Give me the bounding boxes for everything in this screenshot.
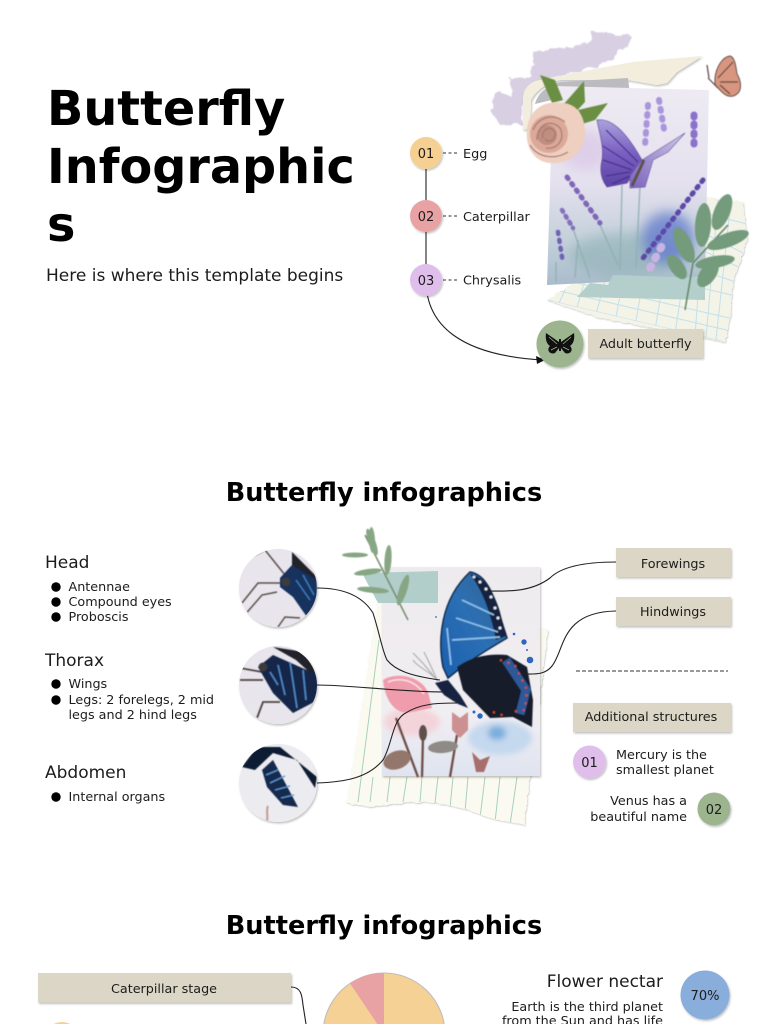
hindwings label: [616, 597, 731, 626]
thorax detail circle: [239, 646, 318, 724]
thorax text block: Legs: 2 forelegs, 2 mid: [68, 693, 214, 708]
main title: Infographic: [47, 140, 355, 195]
teal tape: [362, 571, 438, 603]
grid paper: [547, 197, 747, 342]
leaves above rose: [540, 75, 608, 124]
step 02: Caterpillar: [463, 210, 531, 225]
item 02: Venus has a: [610, 794, 687, 809]
dashes: [443, 153, 457, 280]
step 03: Chrysalis: [463, 274, 521, 288]
adult butterfly label: [588, 329, 703, 358]
adult butterfly icon: [536, 320, 584, 368]
flower nectar text: Earth is the third planet: [511, 1000, 663, 1015]
section heading: diet: Butterfly infographics: [226, 911, 542, 941]
leader lines: [317, 562, 616, 783]
70% badge: 70%: [691, 989, 719, 1004]
thorax text block: Thorax: [44, 651, 104, 671]
lifecycle timeline: [410, 137, 703, 368]
blue butterfly: [413, 572, 533, 727]
head text block: Compound eyes: [68, 595, 172, 610]
additional structures label: Additional structures: [585, 710, 718, 725]
thorax text block: Wings: [68, 677, 108, 692]
70% badge: [680, 970, 730, 1020]
step 01: Egg: [463, 147, 487, 162]
section heading: anatomy: Butterfly infographics: [226, 478, 542, 508]
photo card: [382, 567, 540, 776]
step 01: [410, 137, 487, 169]
blue splashes and washes: [384, 708, 532, 755]
lined paper: [347, 603, 548, 825]
illustration: lavender collage: [490, 32, 751, 342]
item 01: 01: [581, 756, 598, 771]
orange marker: [44, 1022, 80, 1024]
main title: Butterfly: [47, 82, 285, 137]
flower nectar text: [502, 972, 663, 1024]
item 02: 02: [706, 803, 722, 818]
connector line: [426, 153, 542, 360]
abdomen text block: [45, 763, 165, 805]
rose and buds: [381, 676, 490, 777]
grass stems: [556, 185, 640, 282]
forewings label: [616, 548, 731, 577]
cream folded paper: [523, 56, 702, 130]
caterpillar stage label: [38, 973, 291, 1002]
main title: s: [47, 198, 75, 253]
head text block: Head: [45, 553, 89, 573]
rose: [527, 102, 585, 163]
item 01: Mercury is the: [616, 748, 707, 763]
lavender sprigs: [558, 100, 703, 268]
abdomen text block: Internal organs: [68, 790, 165, 805]
head text block: Antennae: [68, 580, 130, 595]
leaf sprig: [342, 527, 412, 620]
item 02: beautiful name: [590, 810, 687, 825]
forewings label: Forewings: [641, 557, 705, 572]
tape: [577, 275, 705, 300]
hindwings label: Hindwings: [640, 605, 706, 620]
item 01: smallest planet: [616, 763, 714, 778]
thorax text block: [44, 651, 214, 723]
caterpillar stage label: Caterpillar stage: [111, 982, 217, 997]
grey tape: [535, 78, 630, 104]
step 02: 02: [418, 210, 434, 225]
abdomen text block: Abdomen: [45, 763, 126, 783]
flower nectar text: Flower nectar: [547, 972, 663, 992]
connector: [291, 987, 306, 1024]
lavender card: [547, 86, 709, 285]
purple butterfly: [597, 120, 685, 188]
head text block: [45, 553, 172, 625]
step 03: 03: [418, 274, 434, 289]
head text block: Proboscis: [68, 610, 129, 625]
small orange butterfly: [707, 56, 740, 96]
purple watercolor splash: [490, 32, 630, 125]
thorax text block: legs and 2 hind legs: [68, 708, 197, 723]
adult butterfly label: Adult butterfly: [599, 337, 692, 352]
item 01: [573, 746, 714, 778]
leaf sprig: [663, 191, 751, 310]
step 02: [410, 200, 531, 232]
item 02: [590, 792, 730, 826]
step 01: 01: [418, 147, 434, 162]
arrowhead: [536, 356, 545, 364]
additional structures label: [573, 703, 731, 732]
pie chart: [323, 973, 445, 1024]
head detail circle: [239, 549, 317, 627]
illustration: blue butterfly collage: [239, 527, 616, 825]
subtitle: Here is where this template begins: [46, 266, 343, 286]
step 03: [410, 264, 521, 296]
abdomen detail circle: [239, 744, 317, 822]
